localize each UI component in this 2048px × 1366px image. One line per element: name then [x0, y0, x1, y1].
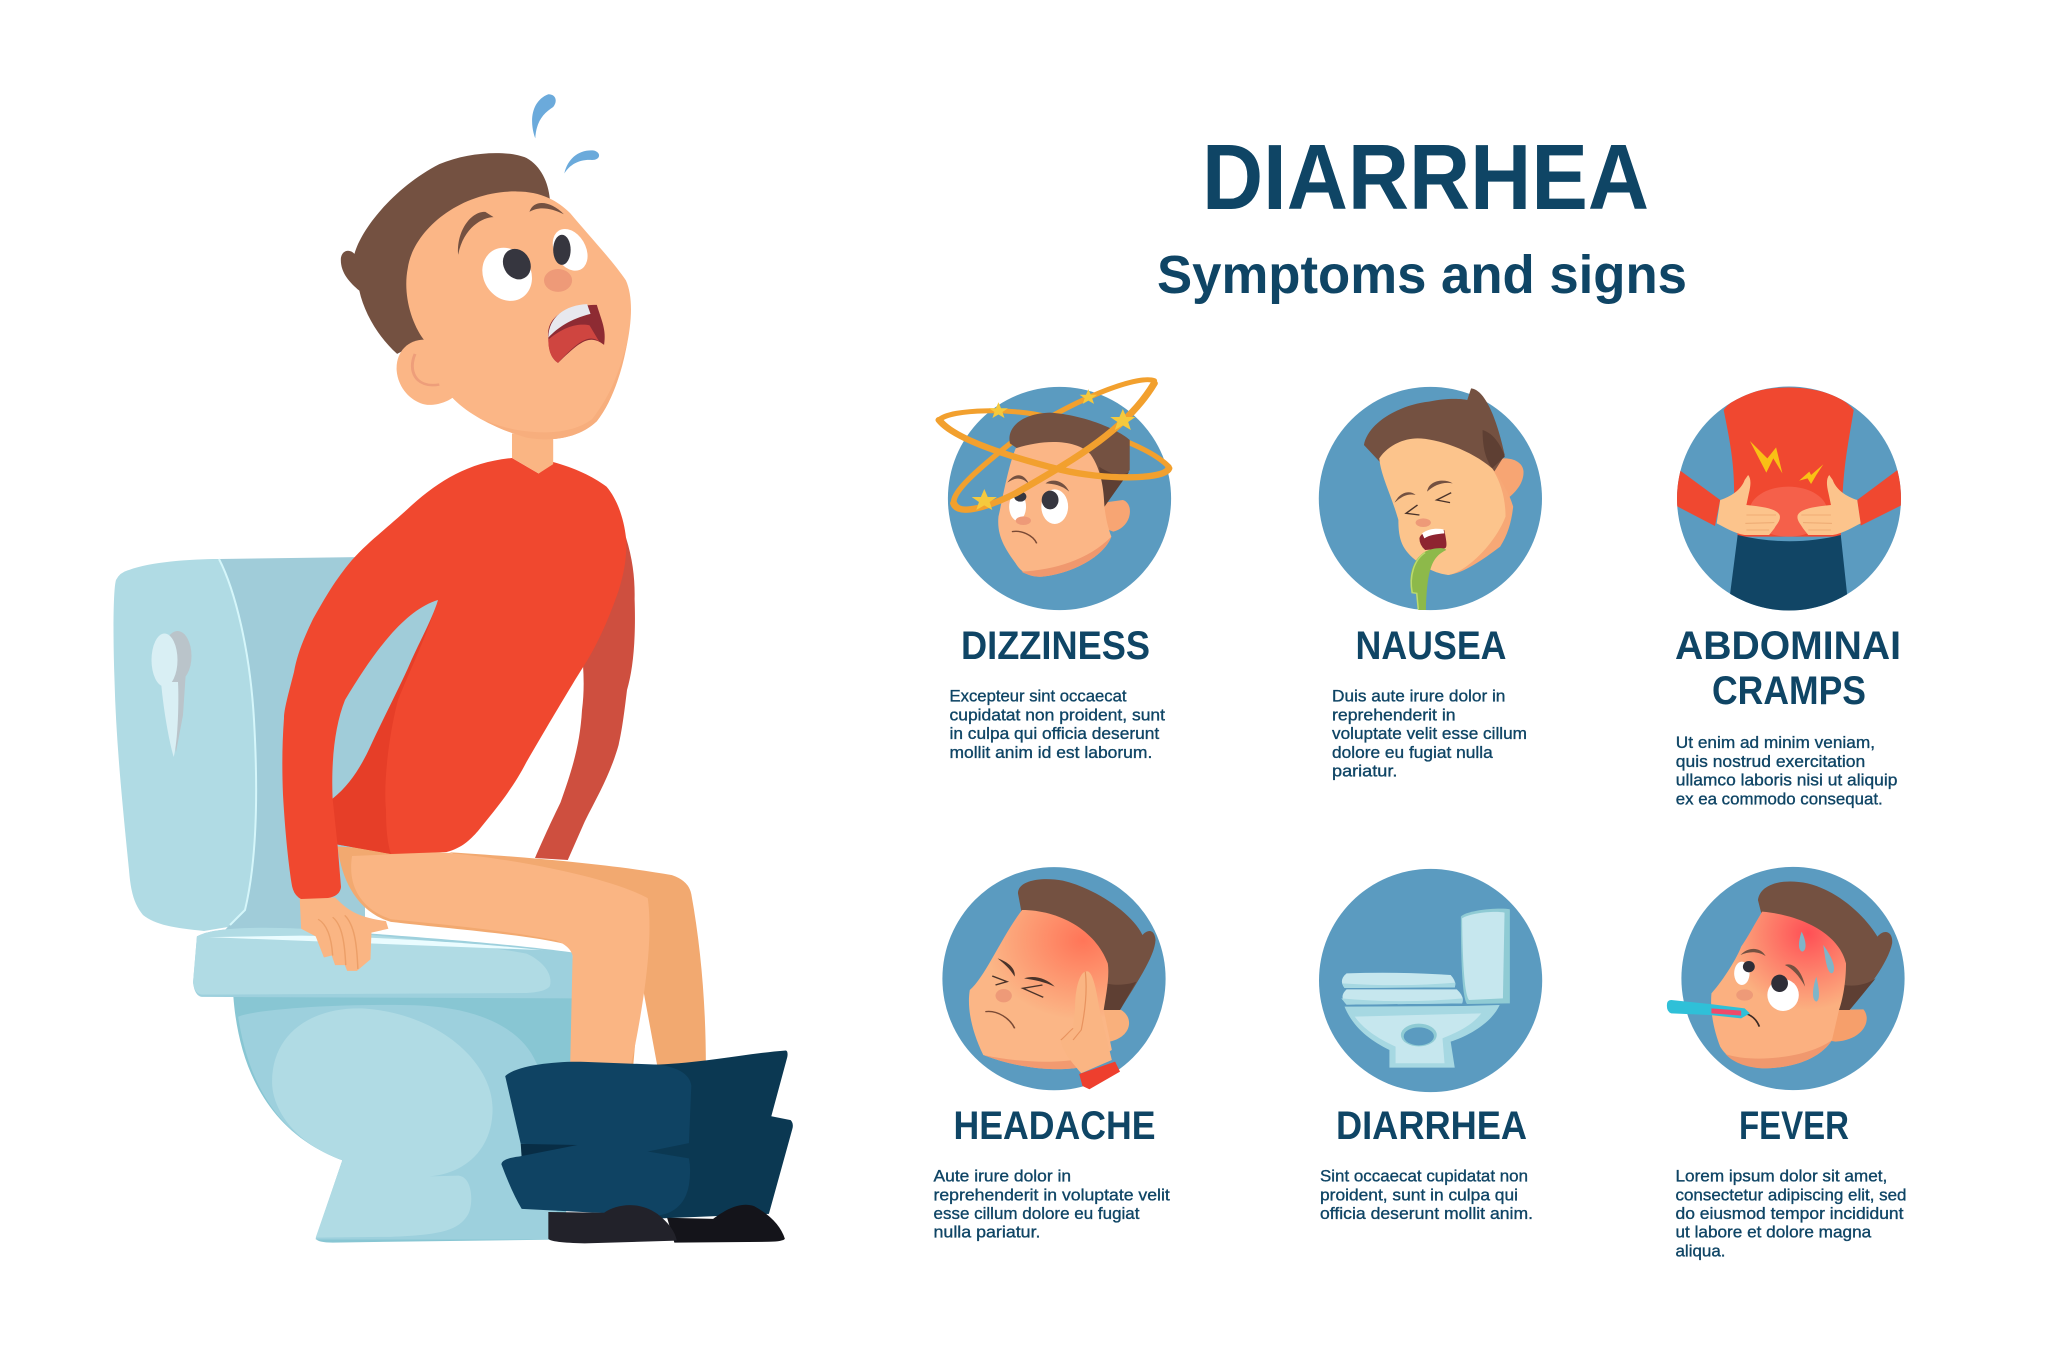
- heading: abdominal cramps: [1675, 624, 1901, 713]
- description: headache: esse cillum dolore eu fugiat: [934, 1204, 1140, 1223]
- icon: stomach with hands: [1671, 386, 1905, 617]
- hand: [300, 897, 388, 971]
- description: fever: aliqua.: [1676, 1241, 1726, 1260]
- panel: nausea: [1319, 387, 1542, 781]
- sweater: [282, 458, 626, 899]
- description: diarrhea: proident, sunt in culpa qui: [1320, 1185, 1518, 1204]
- description: headache: Aute irure dolor in: [934, 1167, 1071, 1186]
- neck and head: [341, 153, 631, 474]
- title: DIARRHEA: [1202, 125, 1649, 229]
- description: abdominal cramps: ex ea commodo consequat.: [1676, 790, 1883, 808]
- description: diarrhea: [1320, 1167, 1533, 1223]
- description: abdominal cramps: Ut enim ad minim veniam,: [1676, 733, 1875, 752]
- description: fever: Lorem ipsum dolor sit amet,: [1676, 1167, 1887, 1186]
- illustration: man on toilet: [114, 94, 793, 1243]
- heading: fever: FEVER: [1739, 1104, 1849, 1148]
- sweat drops: [532, 94, 599, 173]
- trousers and shoes: [501, 1050, 793, 1243]
- heading: diarrhea: DIARRHEA: [1336, 1104, 1527, 1148]
- description: fever: ut labore et dolore magna: [1676, 1223, 1872, 1242]
- description: nausea: [1332, 687, 1527, 781]
- description: fever: consectetur adipiscing elit, sed: [1676, 1185, 1906, 1204]
- description: dizziness: Excepteur sint occaecat: [950, 687, 1127, 706]
- description: diarrhea: officia deserunt mollit anim.: [1320, 1204, 1533, 1223]
- description: dizziness: [950, 687, 1165, 762]
- description: abdominal cramps: [1676, 733, 1897, 808]
- panel: fever: [1667, 867, 1906, 1260]
- toilet tank: [114, 557, 365, 935]
- heading: abdominal cramps: ABDOMINAI: [1675, 624, 1901, 668]
- description: dizziness: cupidatat non proident, sunt: [950, 706, 1165, 724]
- description: headache: reprehenderit in voluptate velit: [934, 1185, 1170, 1204]
- back sleeve: [535, 538, 635, 860]
- icon: vomiting head: [1319, 387, 1542, 610]
- description: nausea: pariatur.: [1332, 762, 1397, 781]
- description: dizziness: in culpa qui officia deserunt: [950, 724, 1159, 743]
- description: abdominal cramps: ullamco laboris nisi ut aliquip: [1676, 771, 1897, 790]
- description: fever: do eiusmod tempor incididunt: [1676, 1204, 1904, 1223]
- subtitle: Symptoms and signs: [1157, 245, 1687, 305]
- heading: abdominal cramps: CRAMPS: [1712, 669, 1866, 713]
- heading: nausea: NAUSEA: [1356, 624, 1506, 668]
- description: headache: nulla pariatur.: [934, 1223, 1040, 1242]
- icon: head with thermometer: [1667, 867, 1905, 1090]
- icon: toilet: [1319, 869, 1542, 1092]
- description: dizziness: mollit anim id est laborum.: [950, 743, 1152, 762]
- description: nausea: voluptate velit esse cillum: [1332, 724, 1527, 743]
- panel: diarrhea: [1319, 869, 1542, 1223]
- description: headache: [934, 1167, 1170, 1242]
- heading: headache: HEADACHE: [954, 1104, 1156, 1148]
- legs: [338, 846, 706, 1067]
- description: nausea: Duis aute irure dolor in: [1332, 687, 1505, 706]
- description: diarrhea: Sint occaecat cupidatat non: [1320, 1167, 1528, 1186]
- toilet bowl and seat: [193, 928, 573, 1243]
- panel: abdominal cramps: [1671, 386, 1905, 808]
- description: fever: [1676, 1167, 1906, 1260]
- heading: dizziness: DIZZINESS: [961, 624, 1150, 668]
- description: nausea: reprehenderit in: [1332, 706, 1456, 724]
- description: abdominal cramps: quis nostrud exercitation: [1676, 752, 1865, 771]
- icon: dizzy head: [939, 380, 1171, 610]
- panel: headache: [934, 867, 1170, 1242]
- description: nausea: dolore eu fugiat nulla: [1332, 743, 1493, 762]
- icon: head with fingers on temple: [942, 867, 1166, 1090]
- panel: dizziness: [939, 380, 1171, 762]
